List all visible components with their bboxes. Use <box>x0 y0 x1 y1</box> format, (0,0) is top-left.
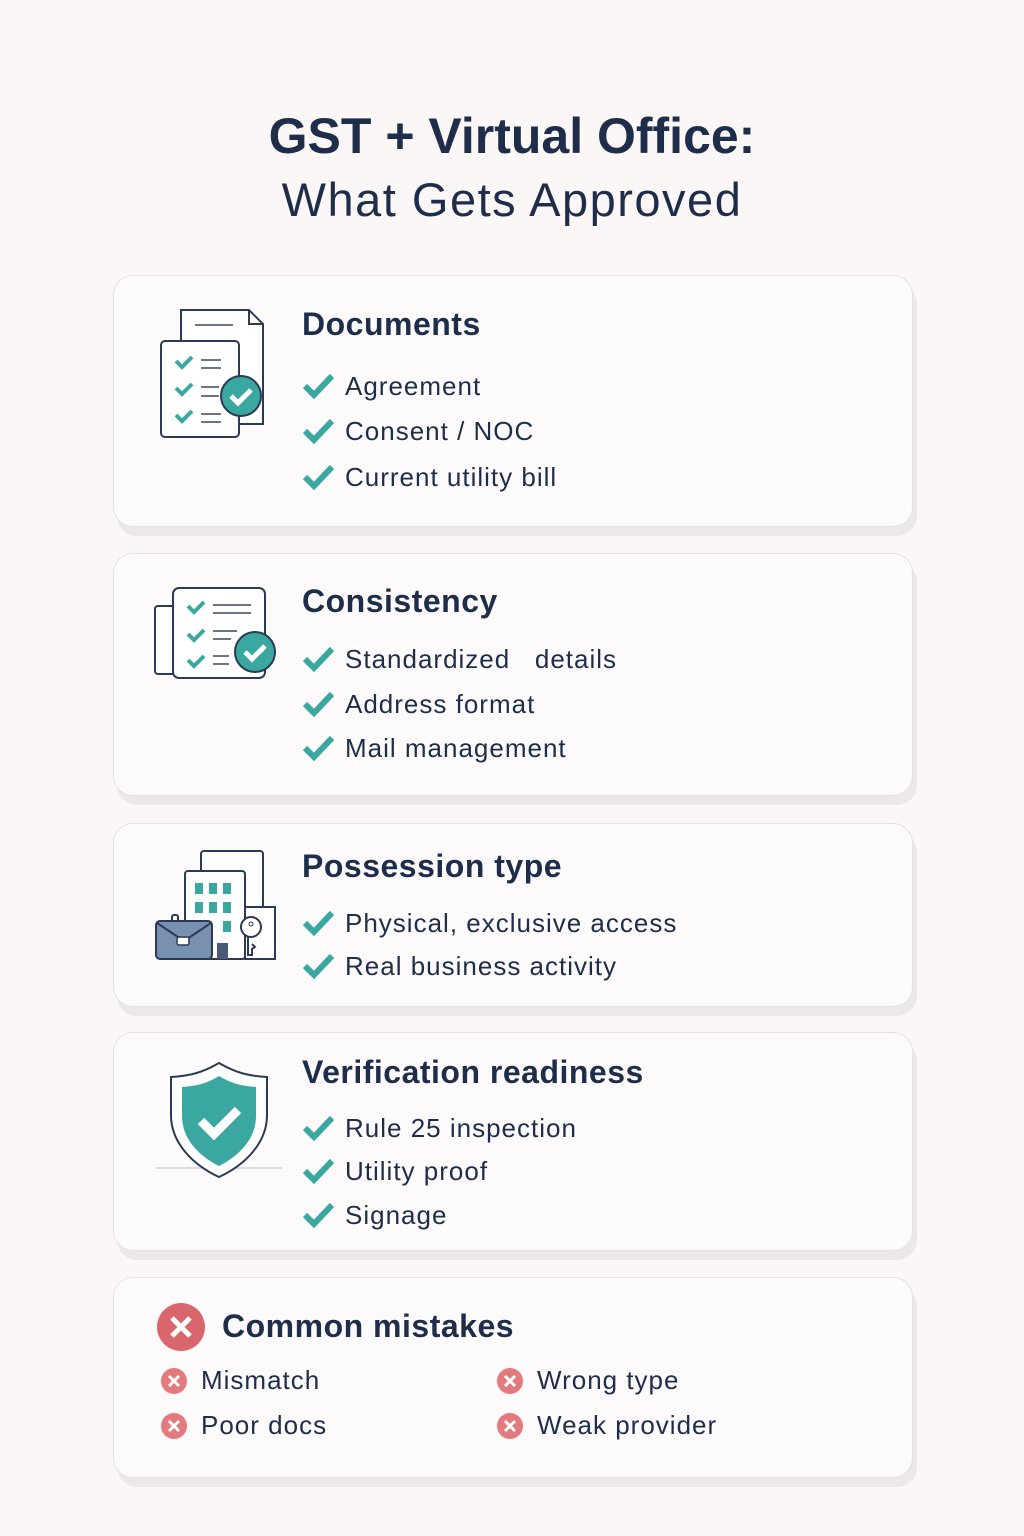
list: Signage <box>345 1200 447 1230</box>
panel: documents <box>113 275 913 527</box>
list: Mail management <box>345 733 567 763</box>
list <box>302 1113 577 1230</box>
title: What Gets Approved <box>282 173 742 226</box>
list <box>302 371 557 492</box>
heading: Consistency <box>302 583 498 619</box>
list <box>302 908 677 981</box>
mistakes list: Weak provider <box>537 1410 717 1440</box>
mistakes list: Mismatch <box>201 1365 320 1395</box>
list: Real business activity <box>345 951 617 981</box>
list: Physical, exclusive access <box>345 908 677 938</box>
list <box>302 644 617 763</box>
title: GST + Virtual Office: <box>269 108 755 164</box>
panel: possession type <box>113 823 913 1007</box>
heading: Documents <box>302 306 481 342</box>
heading: Possession type <box>302 848 562 884</box>
list: Consent / NOC <box>345 416 534 446</box>
list: Agreement <box>345 371 481 401</box>
list: Address format <box>345 689 535 719</box>
panel: common mistakes <box>113 1277 913 1478</box>
title <box>269 108 755 226</box>
list: Standardized details <box>345 644 617 674</box>
icon: documents <box>160 309 264 438</box>
list: Rule 25 inspection <box>345 1113 577 1143</box>
list: Utility proof <box>345 1156 488 1186</box>
heading: Verification readiness <box>302 1054 644 1090</box>
icon: checklist <box>154 587 276 679</box>
heading: Common mistakes <box>222 1308 514 1344</box>
panel: consistency <box>113 553 913 796</box>
list: Current utility bill <box>345 462 557 492</box>
mistakes list: Wrong type <box>537 1365 679 1395</box>
panel: verification readiness <box>113 1032 913 1251</box>
mistakes list <box>161 1365 717 1440</box>
icon: building <box>155 850 276 960</box>
icon: big x <box>157 1303 205 1351</box>
icon: shield <box>156 1062 282 1178</box>
mistakes list: Poor docs <box>201 1410 327 1440</box>
